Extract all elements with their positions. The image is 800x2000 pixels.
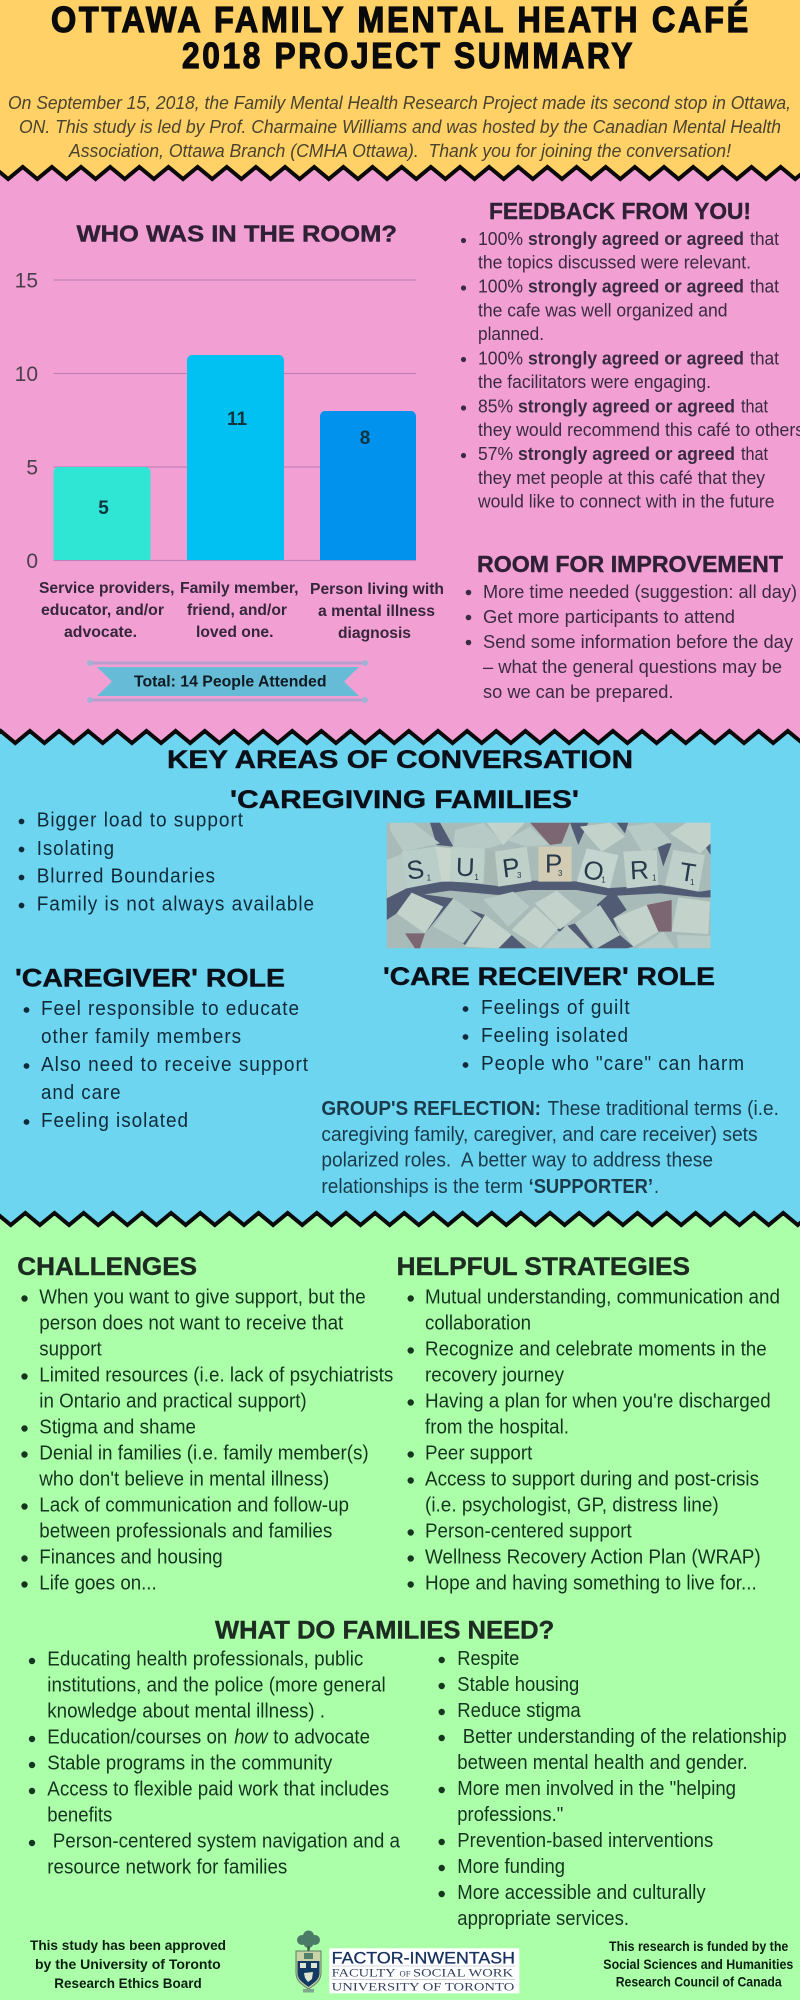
- list: needs, left column: resource network for families: [47, 1857, 287, 1879]
- heading: care receiver role: 'CARE RECEIVER' ROLE: [383, 963, 715, 991]
- logo: factor-inwentash faculty of social work: UNIVERSITY OF TORONTO: [332, 1982, 514, 1994]
- list: needs, right column: More men involved in the "helping: [457, 1778, 736, 1800]
- letter tiles: O: [581, 854, 607, 887]
- list: feedback: the facilitators were engaging.: [478, 371, 711, 392]
- list: feedback: that: [750, 276, 779, 296]
- panel: attendance and feedback: [0, 167, 800, 743]
- list: needs, left column: to advocate: [273, 1727, 370, 1749]
- list: needs, right column: Stable housing: [457, 1674, 579, 1696]
- category labels: educator, and/or: [41, 602, 164, 619]
- list: feedback: 57%: [478, 443, 513, 464]
- list: feedback: strongly agreed or agreed: [518, 443, 735, 464]
- list: challenges: Life goes on...: [39, 1572, 157, 1594]
- list: challenges: Stigma and shame: [39, 1416, 196, 1438]
- bar chart: 10: [15, 363, 38, 386]
- list: helpful strategies: Person-centered support: [425, 1520, 632, 1542]
- letter tiles: S: [405, 854, 426, 886]
- list: feedback: that: [750, 228, 779, 249]
- intro text: Association, Ottawa Branch (CMHA Ottawa). Thank you for joining the conversation!: [68, 140, 731, 161]
- heading: room for improvement: ROOM FOR IMPROVEMENT: [477, 551, 783, 577]
- bar chart: 5: [98, 498, 109, 519]
- title: 2018 PROJECT SUMMARY: [182, 35, 635, 76]
- bar chart: [15, 270, 444, 642]
- list: feedback: that: [741, 396, 768, 416]
- list: care receiver role: [463, 997, 745, 1075]
- category labels: a mental illness: [318, 603, 435, 620]
- letter tiles: P: [545, 849, 562, 879]
- footer: ethics approval: [30, 1937, 226, 1991]
- logo: factor-inwentash faculty of social work: FACULTY: [332, 1968, 397, 1980]
- list: challenges: in Ontario and practical support): [39, 1390, 307, 1412]
- list: feedback: planned.: [478, 323, 544, 344]
- list: needs, left column: Access to flexible paid work that includes: [47, 1779, 389, 1801]
- banner: total attended: Total: 14 People Attended: [134, 674, 326, 690]
- letter tiles: 1: [652, 874, 657, 883]
- logo: factor-inwentash faculty of social work: SOCIAL WORK: [413, 1968, 514, 1980]
- group's reflection: ‘SUPPORTER’: [529, 1176, 653, 1198]
- list: needs, left column: how: [234, 1727, 269, 1749]
- list: challenges: Finances and housing: [39, 1546, 223, 1568]
- list: helpful strategies: Wellness Recovery Action Plan (WRAP): [425, 1546, 761, 1568]
- list: needs, left column: Education/courses on: [47, 1727, 227, 1749]
- letter tiles: 1: [427, 874, 432, 883]
- list: caregiving families: Bigger load to support: [37, 810, 244, 832]
- list: helpful strategies: Peer support: [425, 1442, 533, 1464]
- group's reflection: [321, 1098, 779, 1198]
- list: feedback: 85%: [478, 396, 513, 416]
- panel: header: [0, 0, 800, 182]
- group's reflection: caregiving family, caregiver, and care receiver) sets: [321, 1124, 758, 1146]
- heading: helpful strategies: HELPFUL STRATEGIES: [397, 1253, 690, 1281]
- list: challenges: who don't believe in mental illness): [38, 1468, 329, 1490]
- list: feedback: that: [741, 443, 768, 464]
- list: room for improvement: Get more participants to attend: [483, 606, 735, 627]
- list: feedback: that: [750, 348, 779, 368]
- heading: challenges: CHALLENGES: [17, 1253, 197, 1281]
- list: challenges: person does not want to receive that: [39, 1312, 344, 1334]
- list: caregiving families: Family is not always available: [37, 894, 315, 916]
- list: caregiving families: Isolating: [37, 838, 115, 860]
- list: challenges: Denial in families (i.e. family member(s): [39, 1442, 369, 1464]
- bar chart: 5: [26, 456, 38, 480]
- list: needs, right column: Respite: [457, 1648, 519, 1670]
- list: helpful strategies: Mutual understanding, communication and: [425, 1286, 780, 1308]
- category labels: friend, and/or: [187, 602, 287, 619]
- list: room for improvement: [466, 581, 797, 702]
- list: helpful strategies: from the hospital.: [425, 1416, 569, 1438]
- list: needs, right column: Reduce stigma: [457, 1700, 582, 1722]
- dark gaps between tiles: [387, 823, 711, 948]
- list: caregiver role: [24, 998, 309, 1132]
- list: needs, right column: professions.": [457, 1804, 563, 1826]
- list: caregiver role: Feel responsible to educate: [41, 998, 300, 1020]
- intro text: [8, 92, 791, 161]
- group's reflection: relationships is the term: [321, 1176, 523, 1198]
- category labels: [39, 580, 444, 642]
- category labels: Person living with: [310, 581, 444, 598]
- list: needs, right column: between mental health and gender.: [457, 1752, 748, 1774]
- list: challenges: between professionals and families: [39, 1520, 332, 1542]
- list: caregiver role: Also need to receive support: [41, 1054, 309, 1076]
- list: room for improvement: – what the general questions may be: [483, 656, 782, 677]
- heading: caregiving families: 'CAREGIVING FAMILIES': [230, 786, 579, 814]
- bar chart: 0: [26, 550, 38, 573]
- list: room for improvement: More time needed (suggestion: all day): [483, 581, 797, 602]
- category labels: Family member,: [180, 580, 298, 597]
- letter tiles: P: [501, 852, 521, 883]
- letter tiles: 1: [474, 873, 479, 882]
- panel: key areas of conversation: [0, 731, 800, 1225]
- group's reflection: .: [654, 1176, 659, 1198]
- list: needs, right column: More funding: [457, 1856, 565, 1878]
- list: care receiver role: People who "care" can harm: [481, 1053, 745, 1075]
- list: needs, right column: [438, 1648, 787, 1930]
- footer: ethics approval: This study has been approved: [30, 1937, 226, 1953]
- list: challenges: When you want to give support, but the: [39, 1286, 366, 1308]
- list: challenges: support: [39, 1338, 102, 1360]
- list: needs, left column: institutions, and the police (more general: [47, 1675, 386, 1697]
- list: feedback: strongly agreed or agreed: [518, 396, 735, 416]
- list: room for improvement: Send some information before the day: [483, 631, 794, 652]
- list: caregiving families: [19, 810, 315, 916]
- logo: factor-inwentash faculty of social work: [329, 1948, 519, 1994]
- letter tiles: R: [629, 854, 650, 885]
- list: feedback: [461, 228, 800, 512]
- list: needs, left column: benefits: [47, 1805, 112, 1827]
- list: challenges: Lack of communication and follow-up: [39, 1494, 349, 1516]
- intro text: ON. This study is led by Prof. Charmaine Williams and was hosted by the Canadian Mental Health: [19, 116, 781, 137]
- list: feedback: would like to connect with in the future: [477, 491, 774, 512]
- letter tiles: 1: [601, 876, 606, 885]
- category labels: advocate.: [64, 624, 137, 641]
- list: feedback: strongly agreed or agreed: [528, 276, 744, 296]
- logo: factor-inwentash faculty of social work: FACTOR-INWENTASH: [332, 1949, 515, 1967]
- list: challenges: [21, 1286, 393, 1594]
- title: [51, 0, 751, 76]
- list: caregiver role: and care: [41, 1082, 122, 1104]
- list: needs, right column: More accessible and culturally: [457, 1882, 706, 1904]
- footer: funding: [603, 1938, 793, 1990]
- list: helpful strategies: collaboration: [425, 1312, 531, 1334]
- letter tiles: 3: [558, 869, 563, 878]
- icon: university crest: [296, 1930, 321, 1992]
- list: care receiver role: Feeling isolated: [481, 1025, 629, 1047]
- list: needs, right column: appropriate services.: [457, 1908, 629, 1930]
- list: helpful strategies: recovery journey: [425, 1364, 564, 1386]
- photo: support scrabble tiles: [387, 823, 711, 948]
- letter tiles: T: [678, 856, 698, 888]
- footer: funding: Research Council of Canada: [616, 1974, 782, 1990]
- heading: who was in the room: WHO WAS IN THE ROOM?: [76, 221, 397, 247]
- list: helpful strategies: Recognize and celebrate moments in the: [425, 1338, 767, 1360]
- list: feedback: 100%: [478, 276, 523, 296]
- heading: caregiver role: 'CAREGIVER' ROLE: [15, 965, 285, 993]
- list: caregiver role: other family members: [41, 1026, 242, 1048]
- group's reflection: These traditional terms (i.e.: [548, 1098, 779, 1120]
- letter tiles: [402, 847, 705, 892]
- bar chart: 8: [360, 428, 370, 449]
- letter tiles: U: [455, 852, 475, 882]
- list: helpful strategies: [408, 1286, 780, 1594]
- list: needs, left column: Educating health professionals, public: [47, 1649, 363, 1671]
- letter tiles: 1: [690, 878, 695, 887]
- letter tiles: 3: [517, 871, 522, 880]
- group's reflection: GROUP'S REFLECTION:: [321, 1098, 541, 1120]
- list: feedback: they met people at this café that they: [478, 467, 766, 488]
- category labels: Service providers,: [39, 580, 174, 597]
- footer: ethics approval: by the University of Toronto: [35, 1956, 221, 1972]
- footer: ethics approval: Research Ethics Board: [54, 1975, 202, 1991]
- panel: challenges, strategies and needs: [0, 1213, 800, 2000]
- list: needs, left column: Person-centered system navigation and a: [53, 1831, 401, 1853]
- list: needs, left column: [29, 1649, 401, 1879]
- heading: what do families need: WHAT DO FAMILIES NEED?: [215, 1616, 554, 1644]
- list: feedback: 100%: [478, 228, 523, 249]
- bar chart: 15: [15, 270, 38, 292]
- list: helpful strategies: Having a plan for when you're discharged: [425, 1390, 771, 1412]
- list: feedback: the topics discussed were relevant.: [478, 252, 751, 272]
- list: care receiver role: Feelings of guilt: [481, 997, 631, 1019]
- list: needs, right column: Prevention-based interventions: [457, 1830, 713, 1852]
- list: caregiving families: Blurred Boundaries: [37, 866, 216, 888]
- logo: factor-inwentash faculty of social work: OF: [400, 1970, 411, 1979]
- list: needs, left column: knowledge about mental illness) .: [47, 1701, 325, 1723]
- bar chart: 11: [227, 409, 247, 430]
- list: challenges: Limited resources (i.e. lack of psychiatrists: [39, 1364, 393, 1386]
- list: helpful strategies: Access to support during and post-crisis: [425, 1468, 759, 1490]
- list: caregiver role: Feeling isolated: [41, 1110, 189, 1132]
- list: needs, left column: Stable programs in the community: [47, 1753, 332, 1775]
- list: room for improvement: so we can be prepared.: [483, 681, 674, 702]
- category labels: diagnosis: [338, 625, 411, 642]
- list: feedback: the cafe was well organized and: [478, 300, 728, 320]
- list: feedback: strongly agreed or agreed: [528, 348, 744, 368]
- heading: key areas: KEY AREAS OF CONVERSATION: [167, 746, 633, 774]
- banner: total attended: [87, 660, 368, 703]
- list: feedback: strongly agreed or agreed: [528, 228, 744, 249]
- heading: feedback from you: FEEDBACK FROM YOU!: [489, 198, 751, 224]
- list: feedback: 100%: [478, 348, 523, 368]
- category labels: loved one.: [196, 624, 274, 641]
- list: helpful strategies: Hope and having something to live for...: [425, 1572, 757, 1594]
- list: helpful strategies: (i.e. psychologist, GP, distress line): [425, 1494, 719, 1516]
- group's reflection: polarized roles. A better way to address these: [321, 1150, 713, 1172]
